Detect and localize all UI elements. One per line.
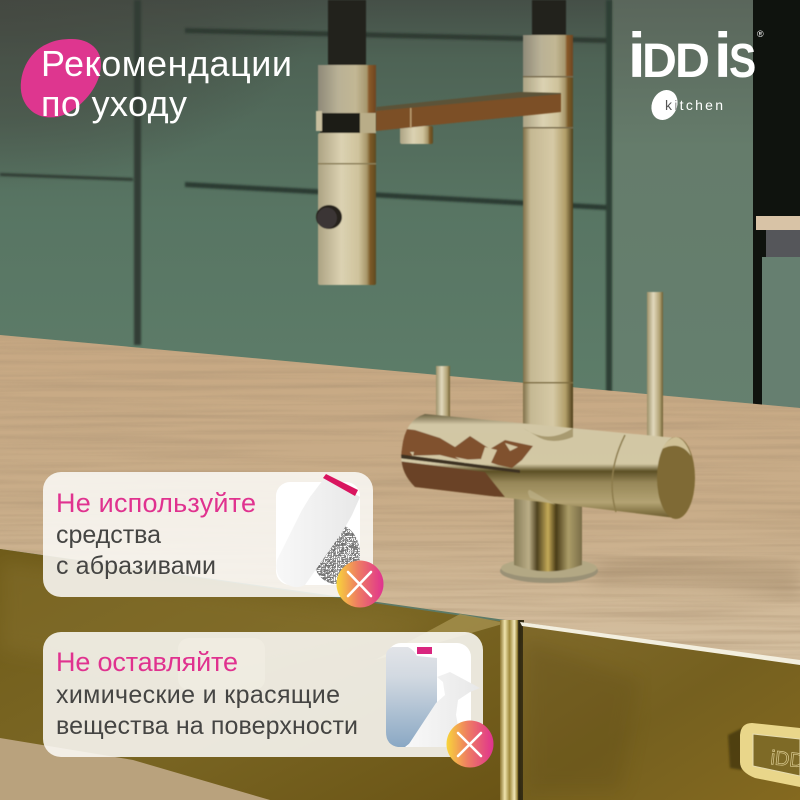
faucet: swivel arm [376,92,561,144]
icon: scouring powder and steel wool [276,474,360,587]
pink blob [21,39,101,117]
logo: IDDIS kitchen: i [714,21,732,91]
text: chemicals on the surface: вещества на поверхности [56,712,358,740]
icon: sprayer button [316,205,342,229]
icon: cross badge [446,720,494,768]
title text: Рекомендации [41,43,292,84]
logo: IDDIS kitchen: D [642,34,677,88]
text: abrasive products: средства [56,521,161,549]
logo: IDDIS kitchen [628,21,764,124]
countertop: wood surface [0,335,800,662]
text: abrasive products: с абразивами [56,552,216,580]
icon: sink handle with embossed logo [740,723,800,787]
text: chemicals on the surface: химические и красящие [56,681,340,709]
background: green kitchen cabinets [0,0,800,420]
left sink: gold basin [0,549,506,800]
heading: do not use: Не используйте [56,488,256,518]
icon: cross badge [336,560,384,608]
right sink front: gold panel [500,620,800,800]
card: chemicals warning [43,632,494,768]
faucet: levers [436,292,663,442]
faucet: pull-down sprayer [316,0,376,285]
title block [21,39,292,124]
heading: do not leave: Не оставляйте [56,647,238,677]
faucet: main column [523,0,573,437]
faucet: stem and base [500,490,598,583]
logo: IDDIS kitchen: D [675,34,710,88]
card: abrasive warning [43,472,384,608]
icon: canister and spray bottle [386,643,480,747]
title text: по уходу [41,83,187,124]
logo: IDDIS kitchen: ® [757,29,764,39]
faucet: horizontal body with rust stains [398,414,695,519]
logo: IDDIS kitchen: i [628,21,646,91]
logo: IDDIS kitchen: kitchen [665,97,723,113]
logo: IDDIS kitchen: S [729,35,756,88]
